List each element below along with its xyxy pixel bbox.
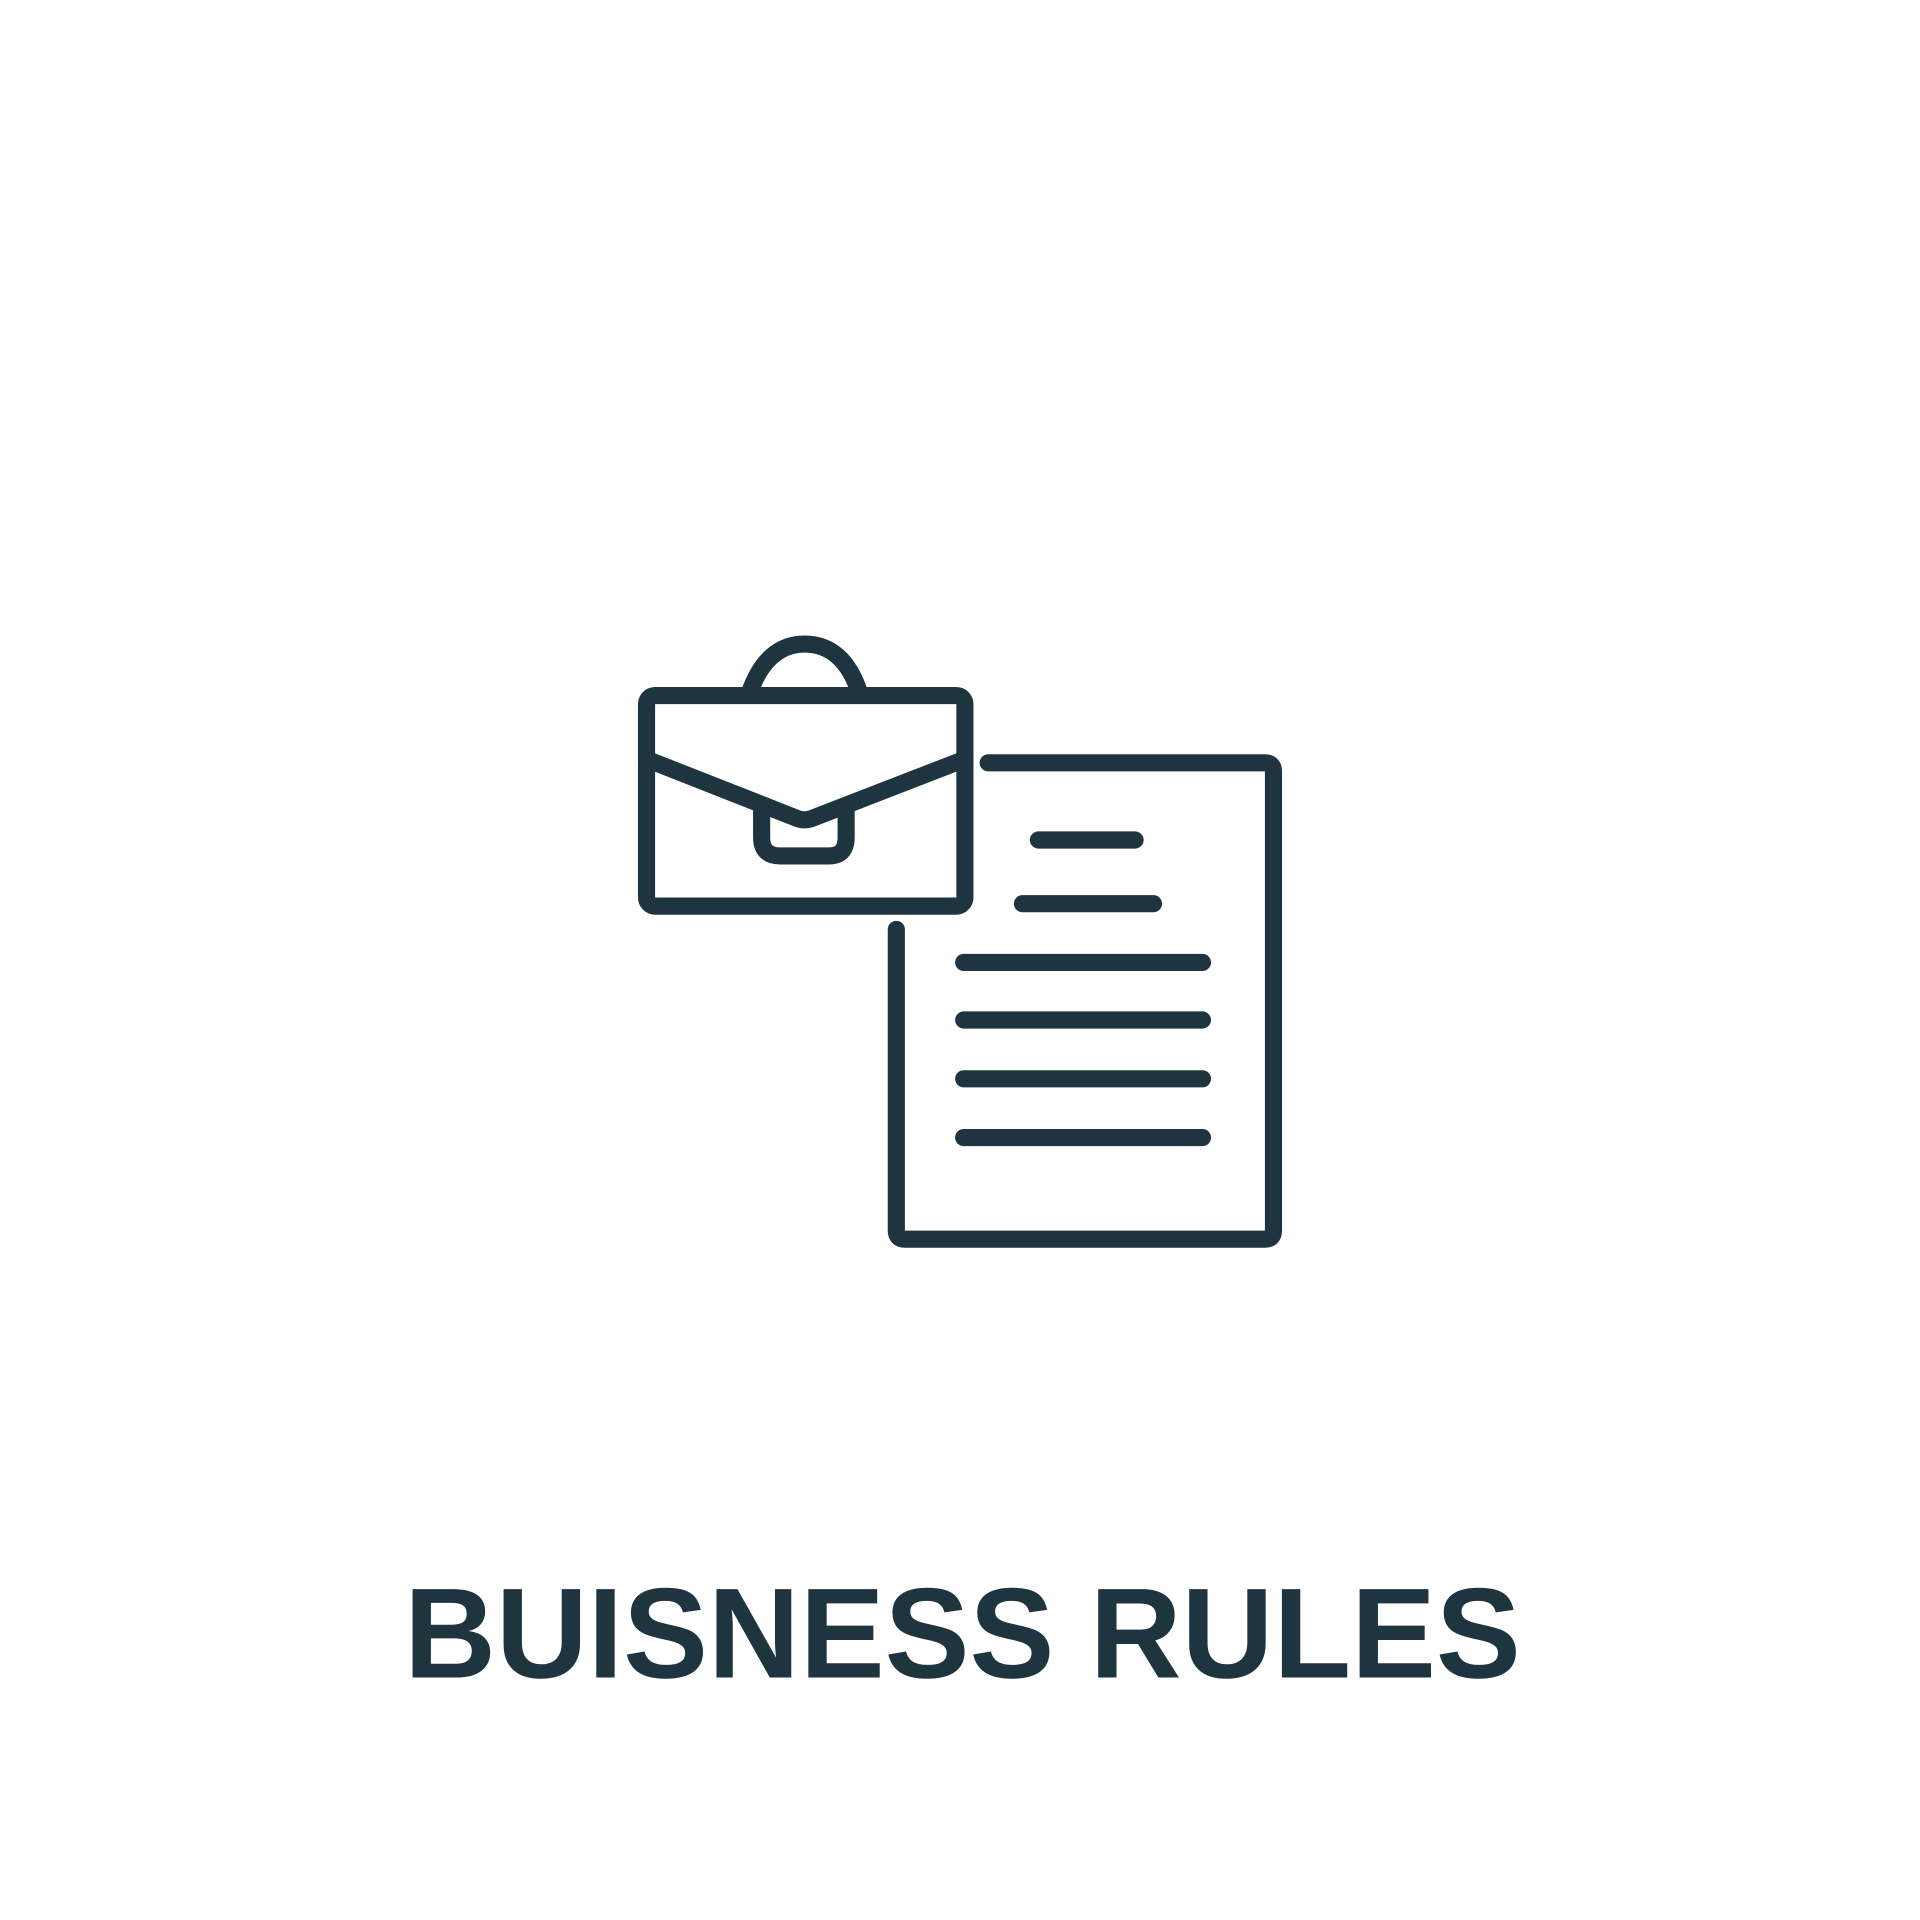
icon: briefcase xyxy=(647,644,965,906)
icon: document xyxy=(896,763,1273,1239)
title: BUISNESS RULES xyxy=(404,1563,1521,1706)
